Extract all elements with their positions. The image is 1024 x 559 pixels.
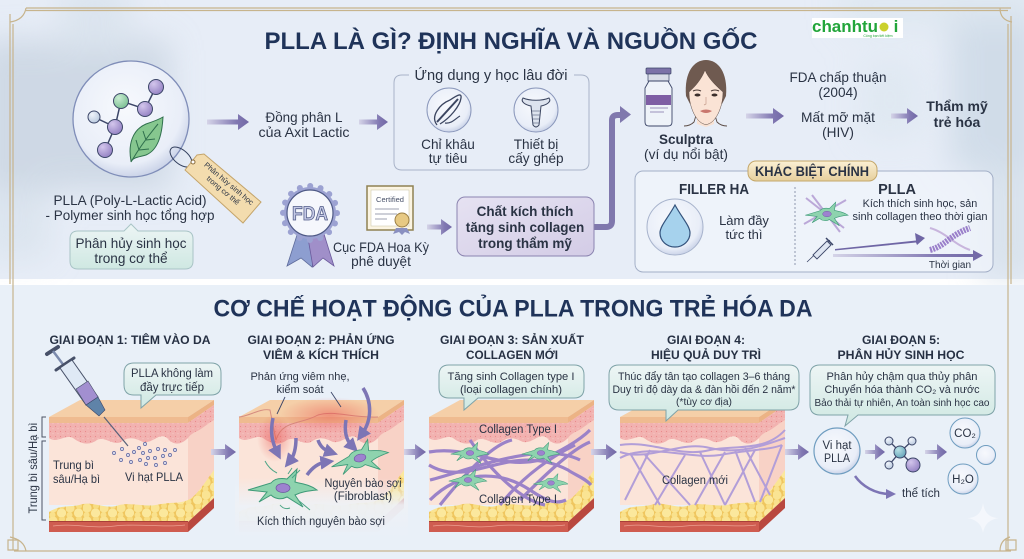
tag: biodegradable label: trong cơ thể: [205, 174, 241, 207]
arrow: [207, 114, 249, 130]
label: suture: tự tiêu: [429, 151, 467, 166]
bubble: [976, 446, 996, 464]
heading: VIÊM & KÍCH THÍCH: [263, 347, 379, 362]
label: deep dermis: Trung bì: [53, 458, 94, 472]
text: PLLA definition: [46, 193, 214, 223]
callout: [609, 365, 799, 421]
arrowhead: [620, 106, 631, 123]
arrow: [785, 444, 809, 460]
tag: biodegradable label: [167, 143, 261, 223]
label: time: Thời gian: [929, 260, 971, 271]
callout: PLLA không làm: [131, 368, 213, 380]
heading: PHÂN HỦY SINH HỌC: [838, 347, 965, 362]
text: US FDA approval: [333, 240, 429, 269]
heading: HIỆU QUẢ DUY TRÌ: [651, 347, 761, 362]
callout: [439, 365, 584, 410]
fibroblast cells: [248, 435, 392, 510]
arrow: time: [833, 250, 983, 261]
text: bio stimulation: Kích thích sinh học, sản: [863, 198, 977, 210]
text: FDA approved 2004: (HIV): [822, 125, 854, 140]
text: aesthetic rejuvenation: trẻ hóa: [934, 114, 981, 130]
label pill: [748, 161, 877, 181]
panel: stage 5: [810, 333, 996, 500]
bubble: H2O: [948, 464, 978, 494]
callout: Phân hủy chậm qua thủy phân: [826, 371, 978, 383]
logo: chanhtuoi: chanhtu: [812, 17, 878, 36]
heading: [838, 333, 965, 362]
icon: PLLA sphere with molecule and leaf: [73, 61, 189, 177]
particles: [112, 442, 176, 466]
text: L isomer: của Axit Lactic: [258, 125, 350, 140]
callout: biodegradable in body: [70, 224, 193, 269]
arrow: [427, 219, 452, 235]
arrow: [404, 444, 426, 460]
collagen mesh: [620, 430, 785, 505]
heading: COLLAGEN MỚI: [466, 347, 558, 362]
arrow: [746, 108, 784, 124]
text: L isomer: Đồng phân L: [266, 110, 343, 125]
text: aesthetic rejuvenation: [926, 98, 988, 130]
bubble: PLLA particle: Vi hạt: [822, 440, 852, 452]
callout: [810, 365, 995, 426]
title: PLLA definition: PLLA LÀ GÌ? ĐỊNH NGHĨA VÀ NGUỒN GỐC: [264, 27, 758, 55]
icon: certificate: Certified: [376, 195, 404, 204]
text: US FDA approval: phê duyệt: [351, 254, 411, 269]
heading: GIAI ĐOẠN 5:: [862, 333, 940, 347]
text: aesthetic rejuvenation: Thẩm mỹ: [926, 98, 988, 114]
label: fibroblast: [324, 478, 402, 503]
text: PLLA definition: - Polymer sinh học tổng hợp: [46, 208, 214, 223]
label: new collagen: Collagen mới: [662, 475, 728, 487]
text: instant fill: tức thì: [726, 227, 762, 242]
heading: GIAI ĐOẠN 4:: [667, 333, 745, 347]
heading: GIAI ĐOẠN 1: TIÊM VÀO DA: [50, 332, 211, 347]
panel: collagen stimulator: trong thẩm mỹ: [478, 236, 572, 251]
panel: key differences: [635, 161, 993, 272]
bracket label: deep dermis: Trung bì sâu/Hạ bì: [26, 422, 40, 514]
label: fibroblast: Nguyên bào sợi: [324, 478, 402, 490]
title: mechanism: CƠ CHẾ HOẠT ĐỘNG CỦA PLLA TRONG TRẺ HÓA DA: [214, 294, 812, 322]
bubble: CO2: [950, 418, 980, 448]
label: implant: cấy ghép: [508, 151, 564, 166]
icon: implant: [514, 88, 558, 132]
label: suture: Chỉ khâu: [421, 137, 475, 152]
label: implant: [508, 137, 564, 166]
heading: Ứng dụng y học lâu đời: [414, 67, 568, 84]
arrow: [359, 114, 388, 130]
heading: [440, 332, 585, 362]
skin block: [620, 400, 785, 532]
text: bio stimulation: sinh collagen theo thời gian: [852, 211, 988, 223]
text: FDA approved 2004: FDA chấp thuận: [790, 70, 886, 85]
callout: biodegradable in body: trong cơ thể: [94, 251, 168, 266]
collagen fibres: [429, 430, 591, 505]
skin block: [49, 400, 214, 532]
label pill: KHÁC BIỆT CHÍNH: [755, 164, 869, 179]
callout: Thúc đẩy tân tạo collagen 3–6 tháng: [618, 371, 790, 383]
text: Sculptra example: (ví dụ nổi bật): [644, 147, 728, 162]
icon: water drop: [647, 199, 703, 255]
icon: syringe: [807, 238, 833, 262]
label: suture: [421, 137, 475, 166]
label: collagen type I: Collagen Type I: [479, 424, 557, 436]
icon: collagen helix: [930, 228, 970, 250]
arrow: [891, 108, 918, 124]
callout: Duy trì độ dày da & đàn hồi đến 2 năm*: [612, 384, 796, 396]
icon: syringe: [47, 347, 128, 446]
callout: biodegradable in body: Phân hủy sinh học: [76, 236, 187, 251]
panel: stage 3: [429, 332, 594, 532]
bubble: CO2: CO₂: [954, 428, 976, 440]
panel: collagen stimulator: Chất kích thích: [477, 204, 573, 219]
panel: long-standing medical applications: [394, 67, 589, 170]
text: L isomer: [258, 110, 350, 140]
arrow: stimulation growth: [835, 233, 925, 250]
bubble: PLLA particle: [814, 428, 860, 474]
panel: stage 4: [609, 333, 799, 532]
skin block: [429, 400, 594, 532]
label: volume: thể tích: [902, 488, 940, 500]
heading: [248, 332, 394, 362]
callout: Bảo thải tự nhiên, An toàn sinh học cao: [814, 397, 990, 409]
arrow: [925, 444, 947, 460]
panel: stage 2: [235, 332, 408, 538]
text: bio stimulation: [852, 198, 988, 223]
label: mild inflammation: Phản ứng viêm nhẹ,: [250, 371, 350, 383]
text: US FDA approval: Cục FDA Hoa Kỳ: [333, 240, 429, 255]
label: deep dermis: sâu/Hạ bì: [53, 472, 100, 486]
decorative sparkle: [967, 503, 999, 533]
bubble: H2O: H₂O: [952, 474, 974, 486]
text: Sculptra example: Sculptra: [659, 132, 713, 147]
tag: biodegradable label: Phân hủy sinh học: [202, 160, 256, 207]
text: FDA approved 2004: (2004): [818, 85, 858, 100]
text: instant fill: Làm đầy: [719, 213, 769, 228]
icon: certificate: [367, 186, 413, 235]
callout: (loại collagen chính): [460, 384, 562, 396]
elbow arrow: [594, 115, 622, 227]
icon: face: [684, 60, 727, 127]
logo: chanhtuoi: Công bạn tiết kiệm: [863, 34, 893, 38]
bottom fade: [235, 478, 408, 538]
label: implant: Thiết bị: [514, 137, 558, 152]
curved arrows: [272, 388, 370, 475]
text: PLLA definition: PLLA (Poly-L-Lactic Acid): [54, 193, 206, 208]
label: deep dermis: [53, 458, 100, 486]
text: Sculptra example: [644, 132, 728, 162]
fibroblast cells: [449, 443, 568, 492]
callout: Tăng sinh Collagen type I: [448, 371, 574, 383]
inflammation: [239, 397, 380, 462]
callout: đầy trực tiếp: [140, 382, 204, 394]
heading: filler HA: FILLER HA: [679, 182, 749, 198]
bracket label: deep dermis: [26, 417, 46, 520]
bubble: PLLA particle: PLLA: [824, 453, 850, 465]
label: PLLA particles: Vi hạt PLLA: [125, 470, 183, 484]
panel: collagen stimulator: tăng sinh collagen: [466, 220, 584, 235]
text: FDA approved 2004: [790, 70, 886, 140]
text: instant fill: [719, 213, 769, 242]
logo: chanhtuoi: i: [894, 17, 898, 36]
label: fibroblast: (Fibroblast): [334, 491, 392, 503]
arrow: [591, 444, 617, 460]
heading: PLLA: PLLA: [878, 182, 916, 198]
heading: GIAI ĐOẠN 3: SẢN XUẤT: [440, 332, 585, 347]
label: mild inflammation: [250, 371, 350, 414]
arrow: [865, 444, 885, 460]
icon: suture thread: [427, 88, 471, 132]
icon: FDA rosette: FDA: [292, 204, 328, 225]
heading: [651, 333, 761, 362]
text: FDA approved 2004: Mất mỡ mặt: [801, 110, 875, 125]
panel: collagen stimulator: [457, 197, 594, 256]
label: stimulation: Kích thích nguyên bào sợi: [257, 516, 385, 528]
callout: [124, 363, 221, 408]
label: mild inflammation: kiểm soát: [276, 384, 324, 396]
icon: FDA rosette: [283, 186, 337, 267]
icon: Sculptra vial: [645, 68, 672, 126]
logo: chanhtuoi: [812, 17, 903, 38]
heading: GIAI ĐOẠN 2: PHẢN ỨNG: [248, 332, 394, 347]
callout: Chuyển hóa thành CO₂ và nước: [824, 384, 980, 396]
arrow: [211, 444, 236, 460]
panel: stage 1: [26, 332, 221, 532]
icon: molecule: [885, 437, 920, 472]
callout: (*tùy cơ địa): [676, 396, 732, 408]
label: collagen type I: Collagen Type I: [479, 494, 557, 506]
curved arrow to volume: [855, 476, 890, 494]
skin block: [239, 400, 404, 532]
icon: fibroblast: [804, 195, 848, 232]
